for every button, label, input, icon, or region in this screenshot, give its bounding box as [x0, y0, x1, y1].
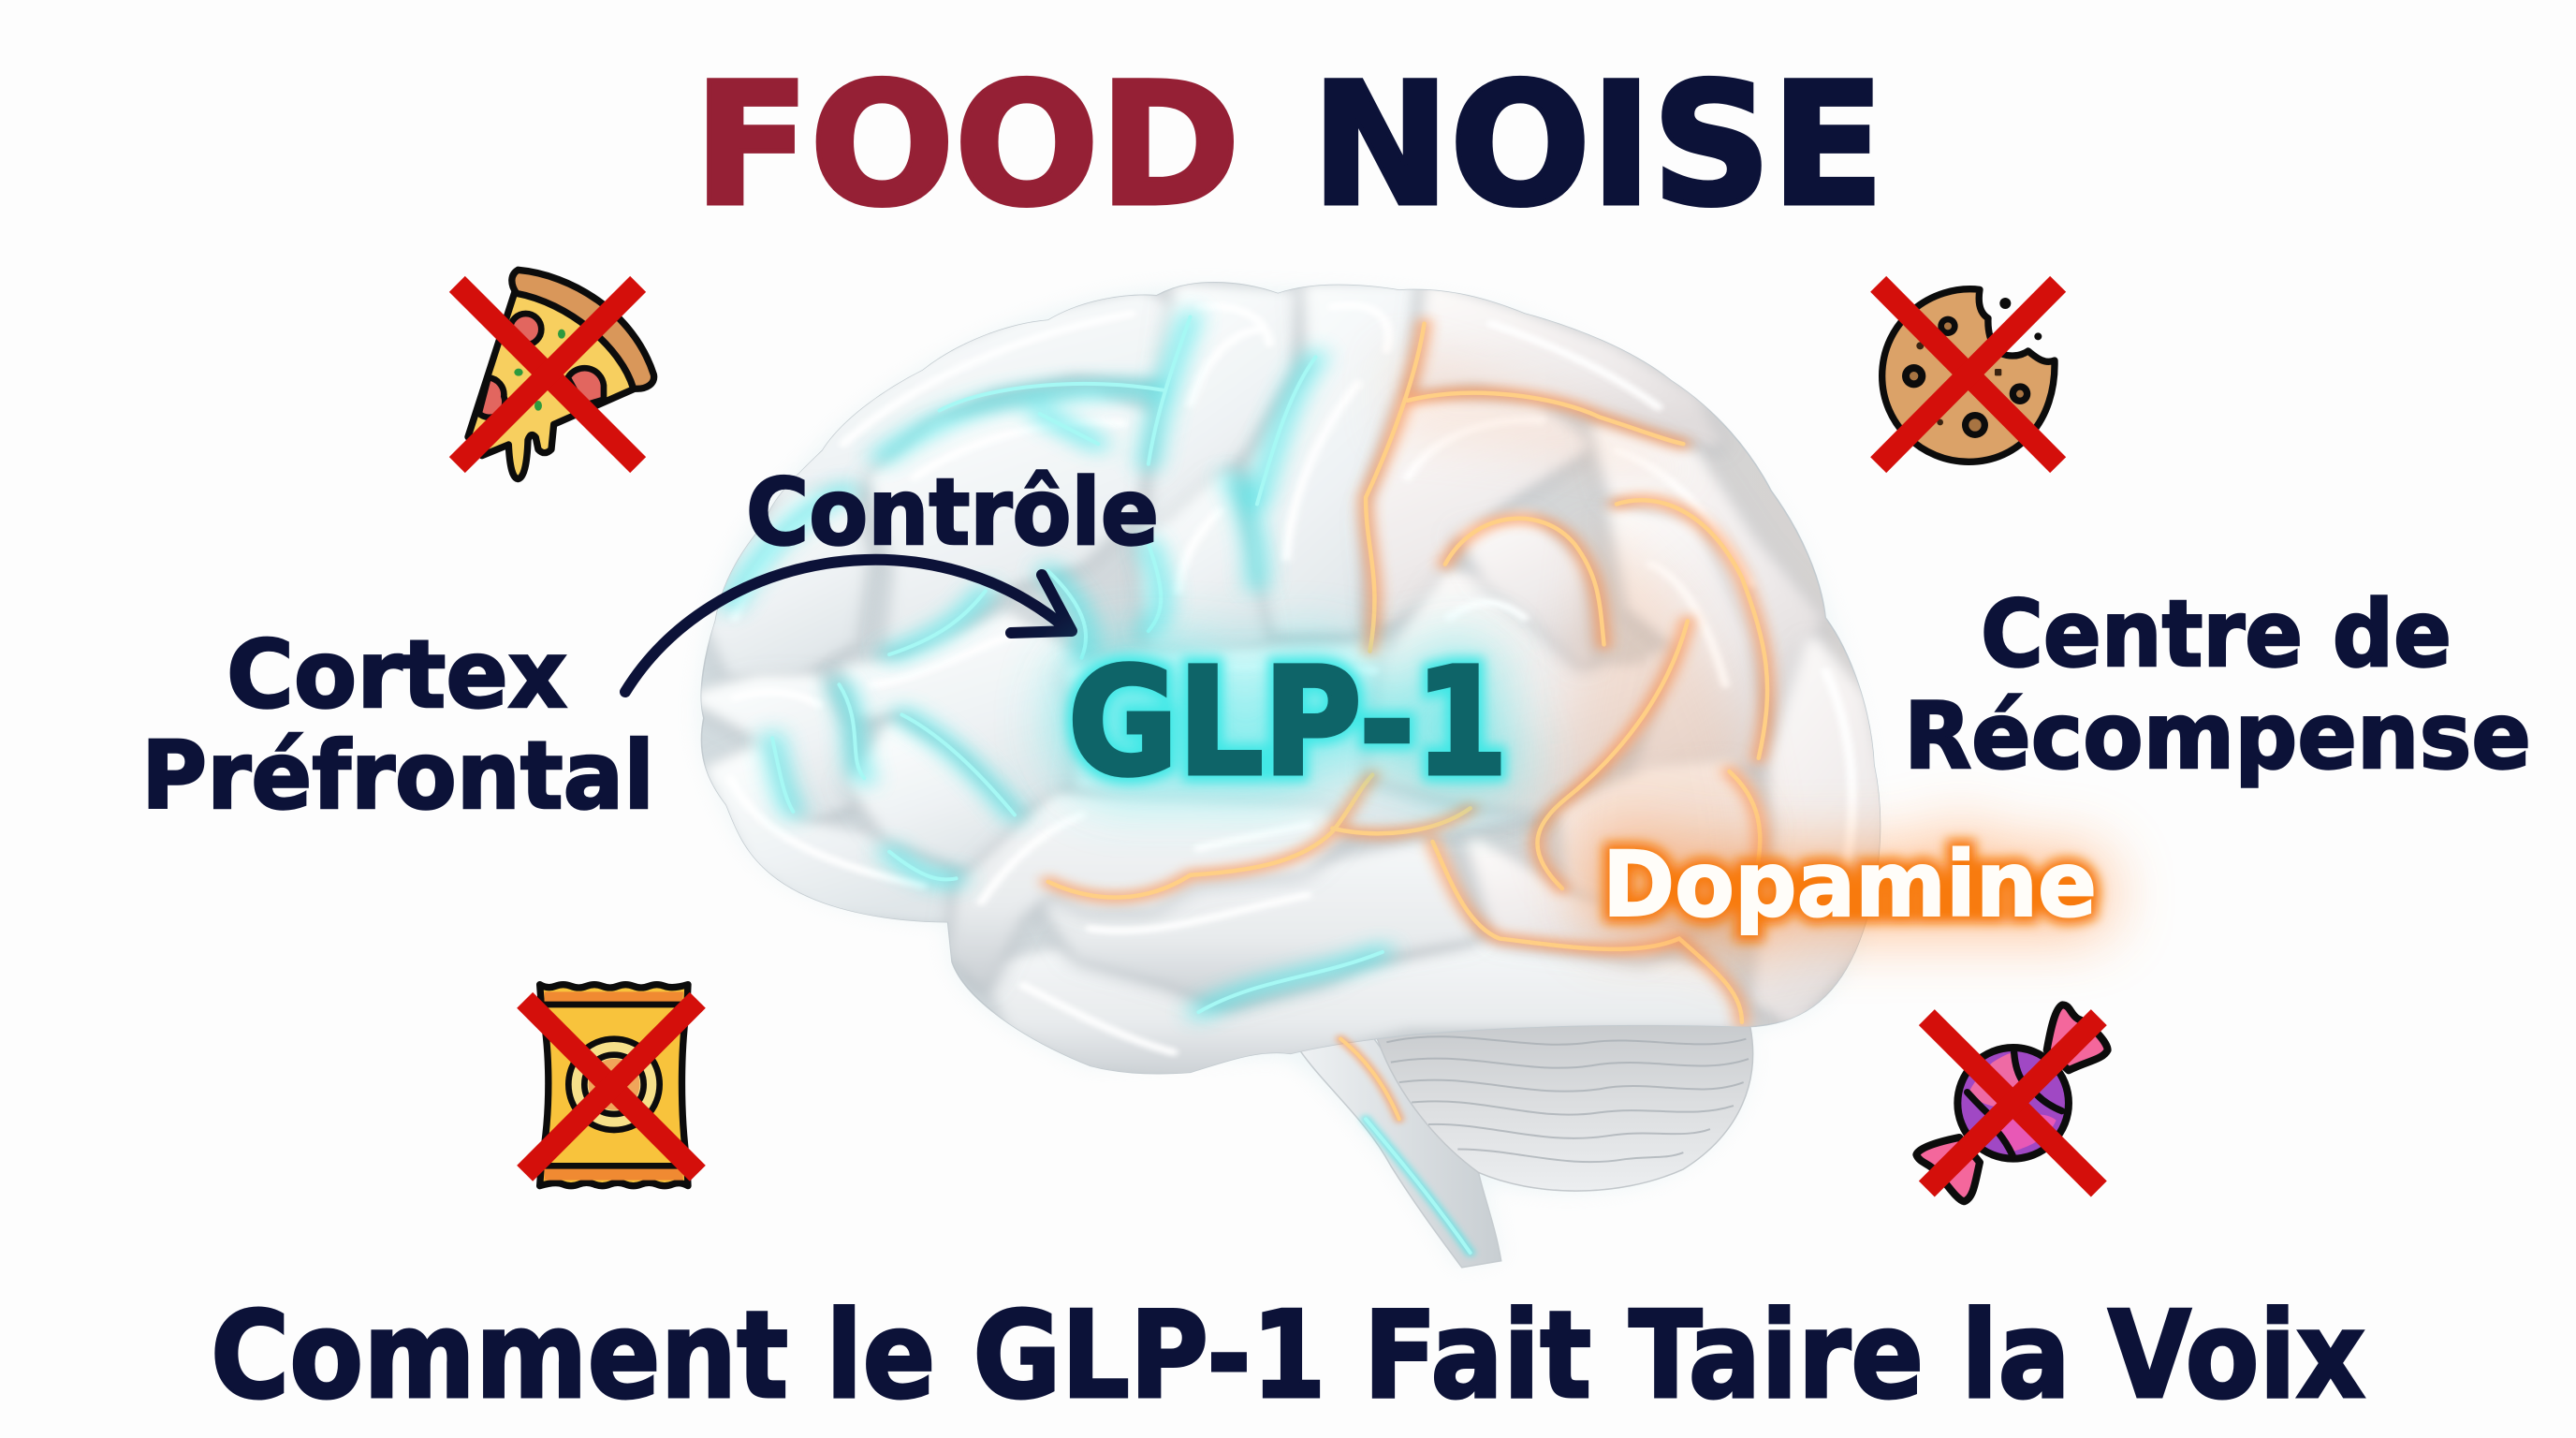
- icon: crossed-out pizza: [457, 270, 654, 479]
- gloss highlights: [730, 305, 1852, 1052]
- label: GLP-1 with cyan glow: GLP-1: [1068, 637, 1508, 809]
- label: Contrôle: Contrôle: [746, 460, 1159, 566]
- warm tint on right side: [1555, 524, 1761, 948]
- brain soft halo: [700, 286, 1870, 1266]
- arrow: prefrontal cortex to GLP-1: [625, 560, 1072, 692]
- label: Centre de Récompense: Récompense: [1904, 683, 2531, 790]
- label: GLP-1 with cyan glow: GLP-1: [1068, 637, 1508, 809]
- label: GLP-1 with cyan glow: GLP-1: [1068, 637, 1508, 809]
- brainstem: [1299, 1039, 1501, 1268]
- label: Cortex Préfrontal: Préfrontal: [141, 721, 654, 830]
- gyri: frontal and parietal folds: [701, 290, 1884, 1019]
- label: Centre de Récompense: Centre de: [1981, 581, 2452, 688]
- cyan wide glows: [730, 317, 1383, 1012]
- label: Dopamine with orange glow: Dopamine: [1603, 832, 2097, 937]
- icon: crossed-out snack bag: [525, 985, 697, 1186]
- cerebellum: [1374, 1018, 1753, 1191]
- brain illustration: [700, 283, 1884, 1268]
- orange wide glows: [1048, 324, 1767, 1022]
- cyan bright lines: [772, 317, 1383, 1012]
- label: Cortex Préfrontal: [141, 620, 654, 830]
- subtitle: Comment le GLP-1 Fait Taire la Voix: [211, 1286, 2365, 1426]
- brainstem glow lines: [1340, 1039, 1471, 1253]
- icon: crossed-out candy: [1916, 1005, 2108, 1201]
- title: [694, 48, 1884, 243]
- title: FOOD: [694, 48, 1240, 243]
- orange bright lines: [1048, 324, 1767, 1022]
- label: Dopamine with orange glow: Dopamine: [1603, 832, 2097, 937]
- gyri: temporal lobe: [956, 800, 1742, 1076]
- cerebrum gyri and glow lines: [701, 290, 1884, 1076]
- title: NOISE: [1311, 48, 1884, 243]
- label: Centre de Récompense: [1904, 581, 2531, 790]
- label: Cortex Préfrontal: Cortex: [227, 620, 567, 729]
- label: Dopamine with orange glow: Dopamine: [1603, 832, 2097, 937]
- cerebrum base: [701, 283, 1880, 1074]
- icon: crossed-out cookie: [1879, 284, 2058, 465]
